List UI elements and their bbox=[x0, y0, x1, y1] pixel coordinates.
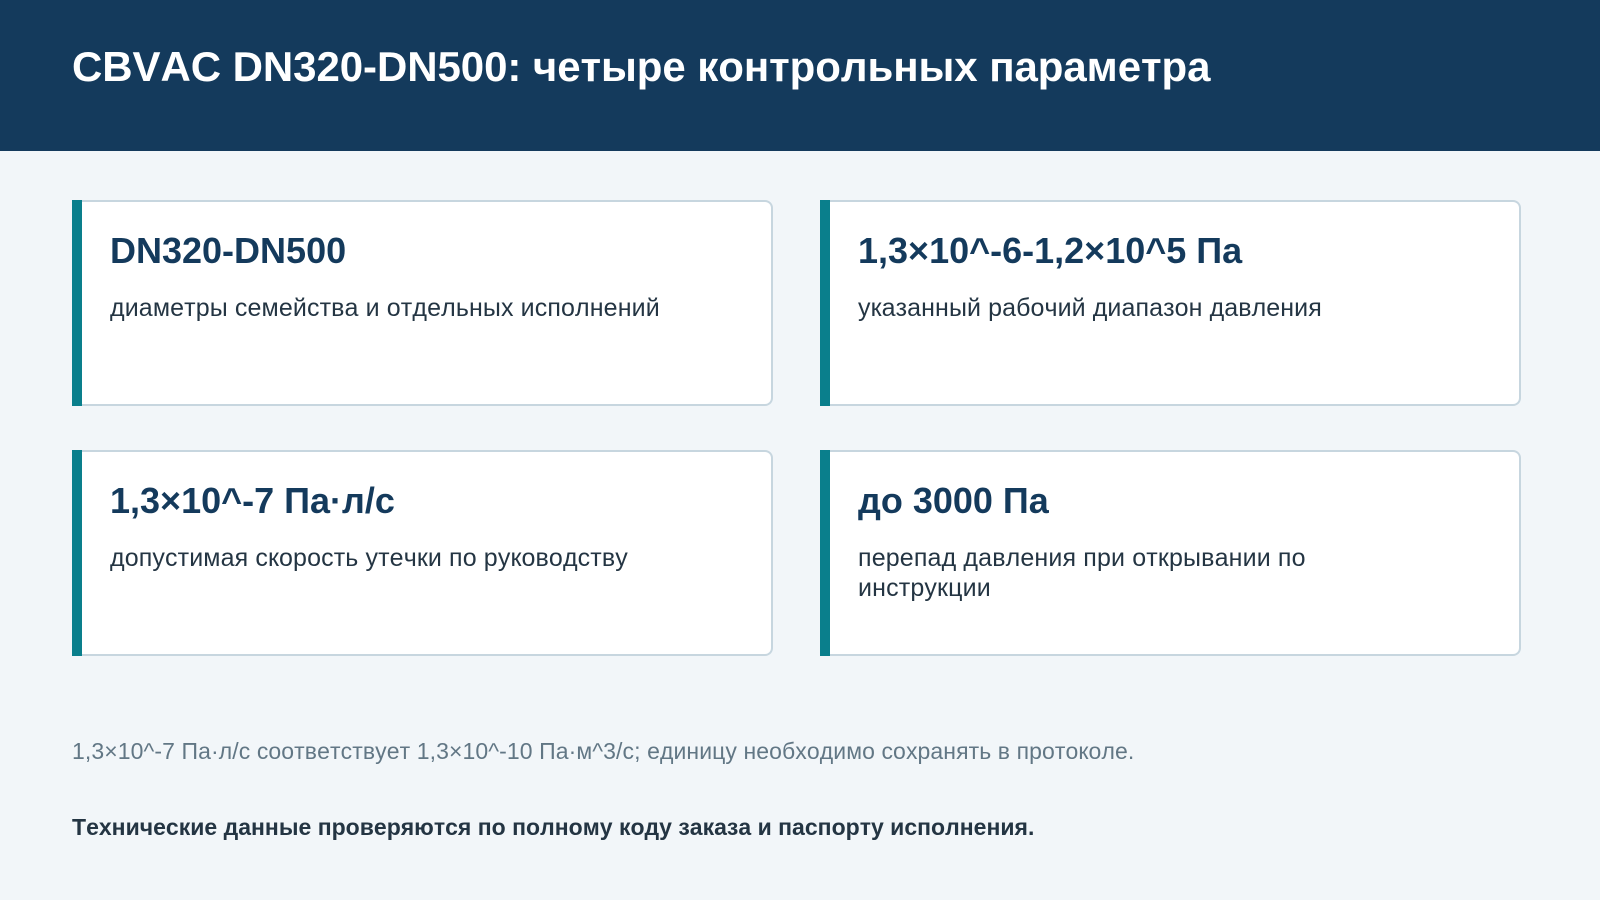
metric: differential pressure: до 3000 Па bbox=[858, 480, 1049, 521]
header band bbox=[0, 0, 1600, 151]
description: pressure range: указанный рабочий диапазон давления bbox=[858, 294, 1322, 322]
metric: leak rate: 1,3×10^-7 Па·л/с bbox=[110, 480, 395, 521]
accent bar bbox=[72, 200, 82, 406]
panel: leak rate bbox=[72, 450, 773, 656]
accent bar bbox=[820, 450, 830, 656]
footnote: 1,3×10^-7 Па·л/с соответствует 1,3×10^-10 Па·м^3/с; единицу необходимо сохранять в протоколе. bbox=[72, 738, 1134, 764]
description: leak rate: допустимая скорость утечки по руководству bbox=[110, 544, 628, 572]
panel: pressure range bbox=[820, 200, 1521, 406]
accent bar bbox=[72, 450, 82, 656]
panel: differential pressure bbox=[820, 450, 1521, 656]
title: CBVAC DN320-DN500: четыре контрольных параметра bbox=[72, 43, 1210, 90]
panel: diameters bbox=[72, 200, 773, 406]
closing statement: Технические данные проверяются по полному коду заказа и паспорту исполнения. bbox=[72, 814, 1034, 840]
description: diameters: диаметры семейства и отдельных исполнений bbox=[110, 294, 660, 322]
description: differential pressure: перепад давления при открывании по инструкции bbox=[858, 544, 1306, 602]
metric: pressure range: 1,3×10^-6-1,2×10^5 Па bbox=[858, 230, 1242, 271]
metric: diameters: DN320-DN500 bbox=[110, 230, 346, 271]
accent bar bbox=[820, 200, 830, 406]
